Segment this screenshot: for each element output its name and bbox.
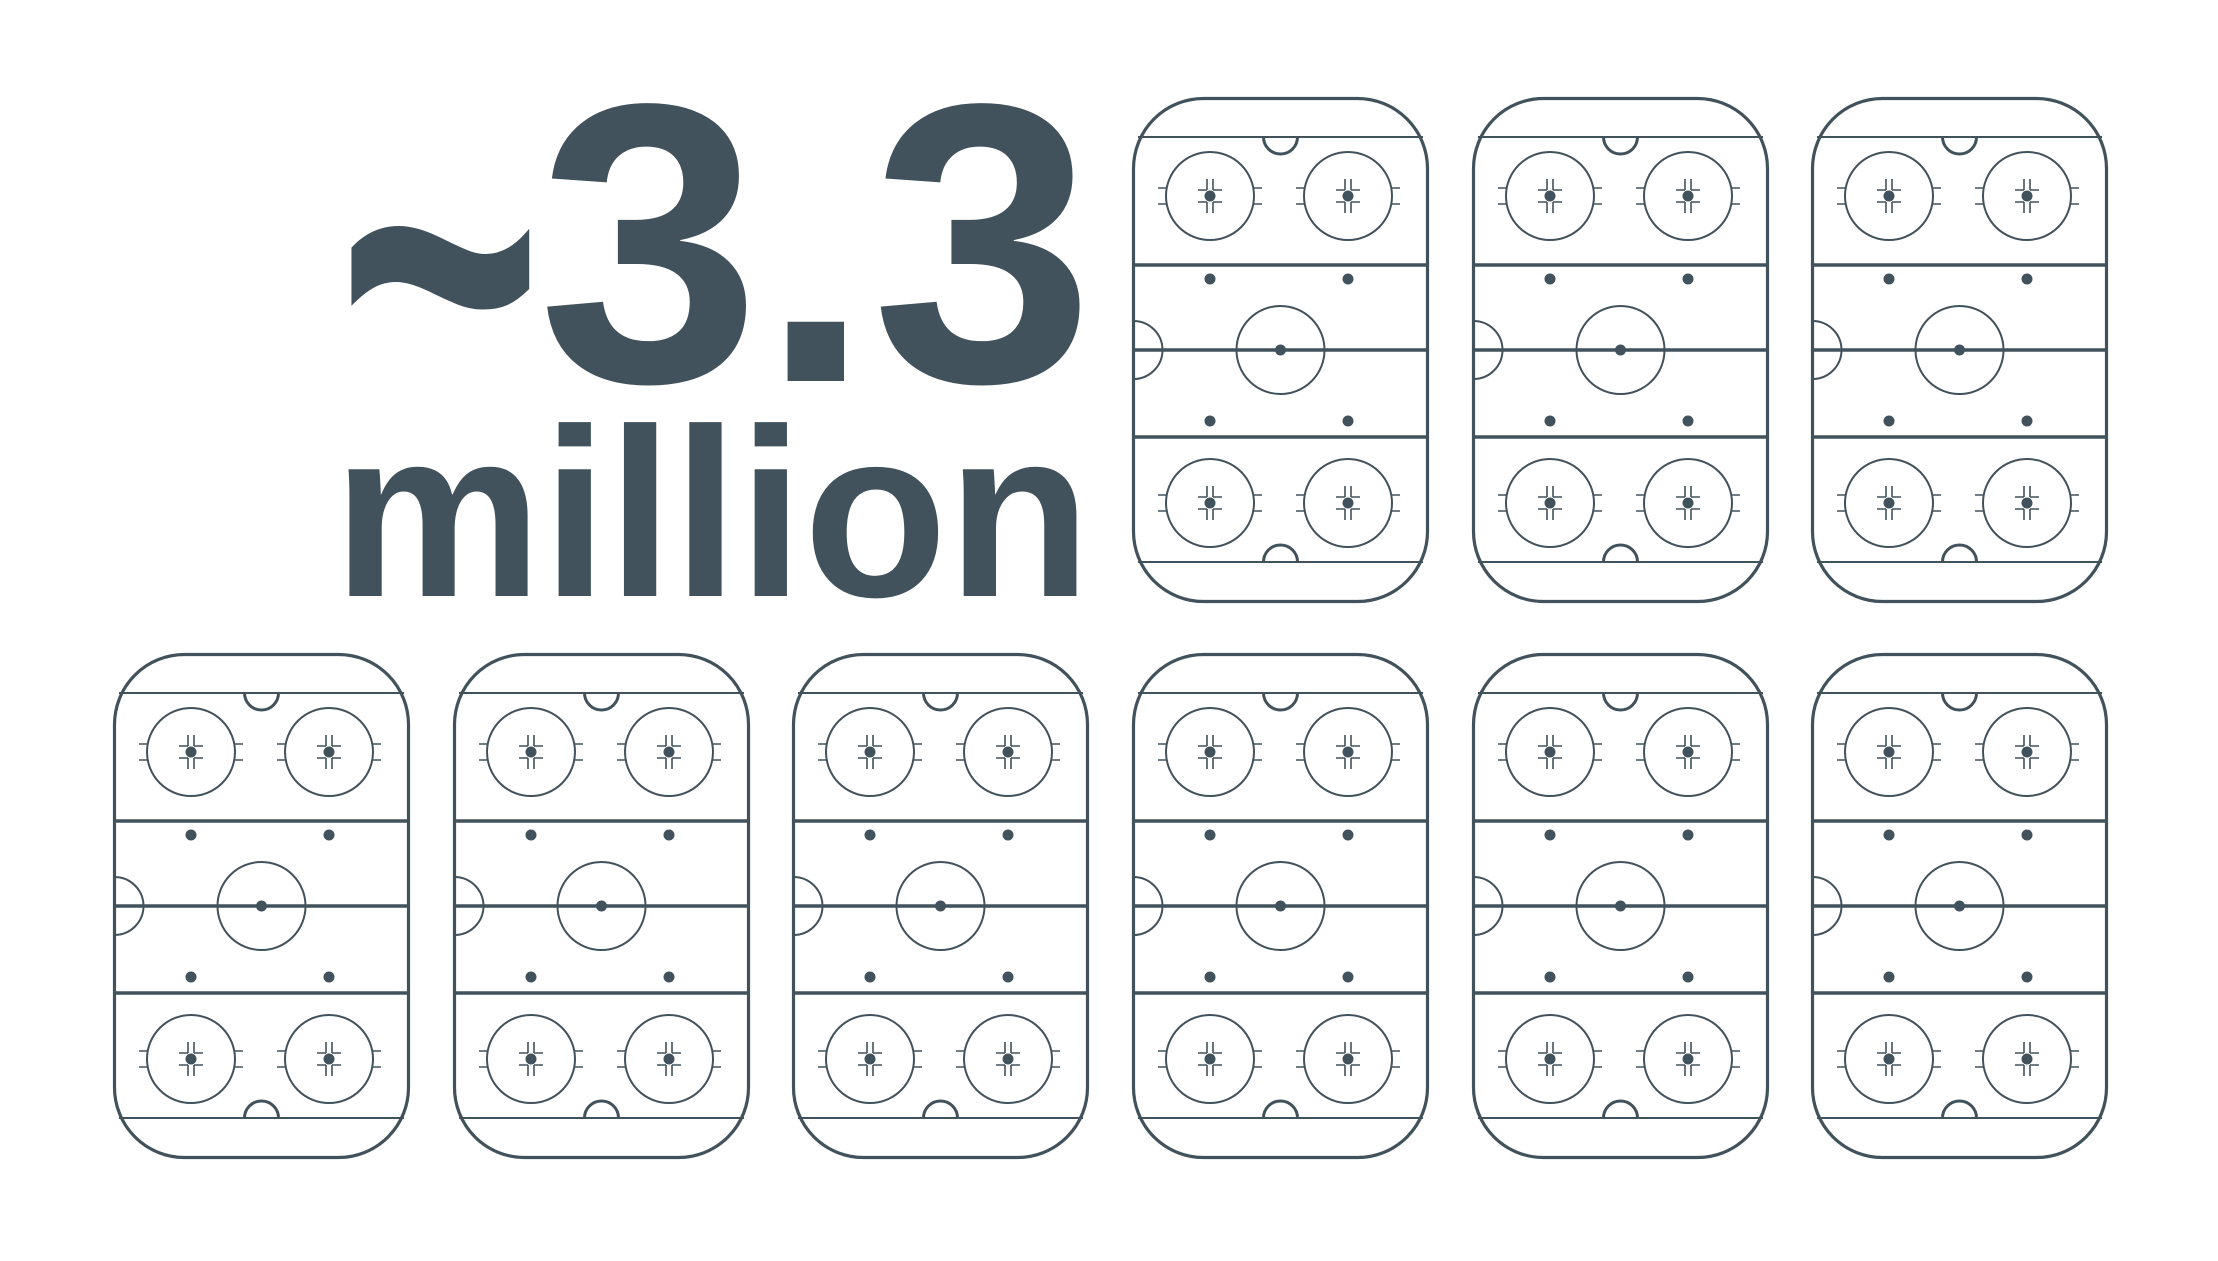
headline number (340, 0, 1094, 534)
rink 3 (1812, 98, 2106, 602)
rinks grid (114, 98, 2106, 1158)
rink 4 (114, 654, 408, 1158)
word million: million (333, 379, 1091, 647)
rink 9 (1812, 654, 2106, 1158)
number 3.3: 3.3 (538, 22, 1094, 466)
tilde: ~ (340, 0, 540, 534)
rink 1 (1134, 98, 1428, 602)
rink 8 (1474, 654, 1768, 1158)
rink 7 (1134, 654, 1428, 1158)
rink 6 (794, 654, 1088, 1158)
rink 2 (1474, 98, 1768, 602)
rink 5 (454, 654, 748, 1158)
